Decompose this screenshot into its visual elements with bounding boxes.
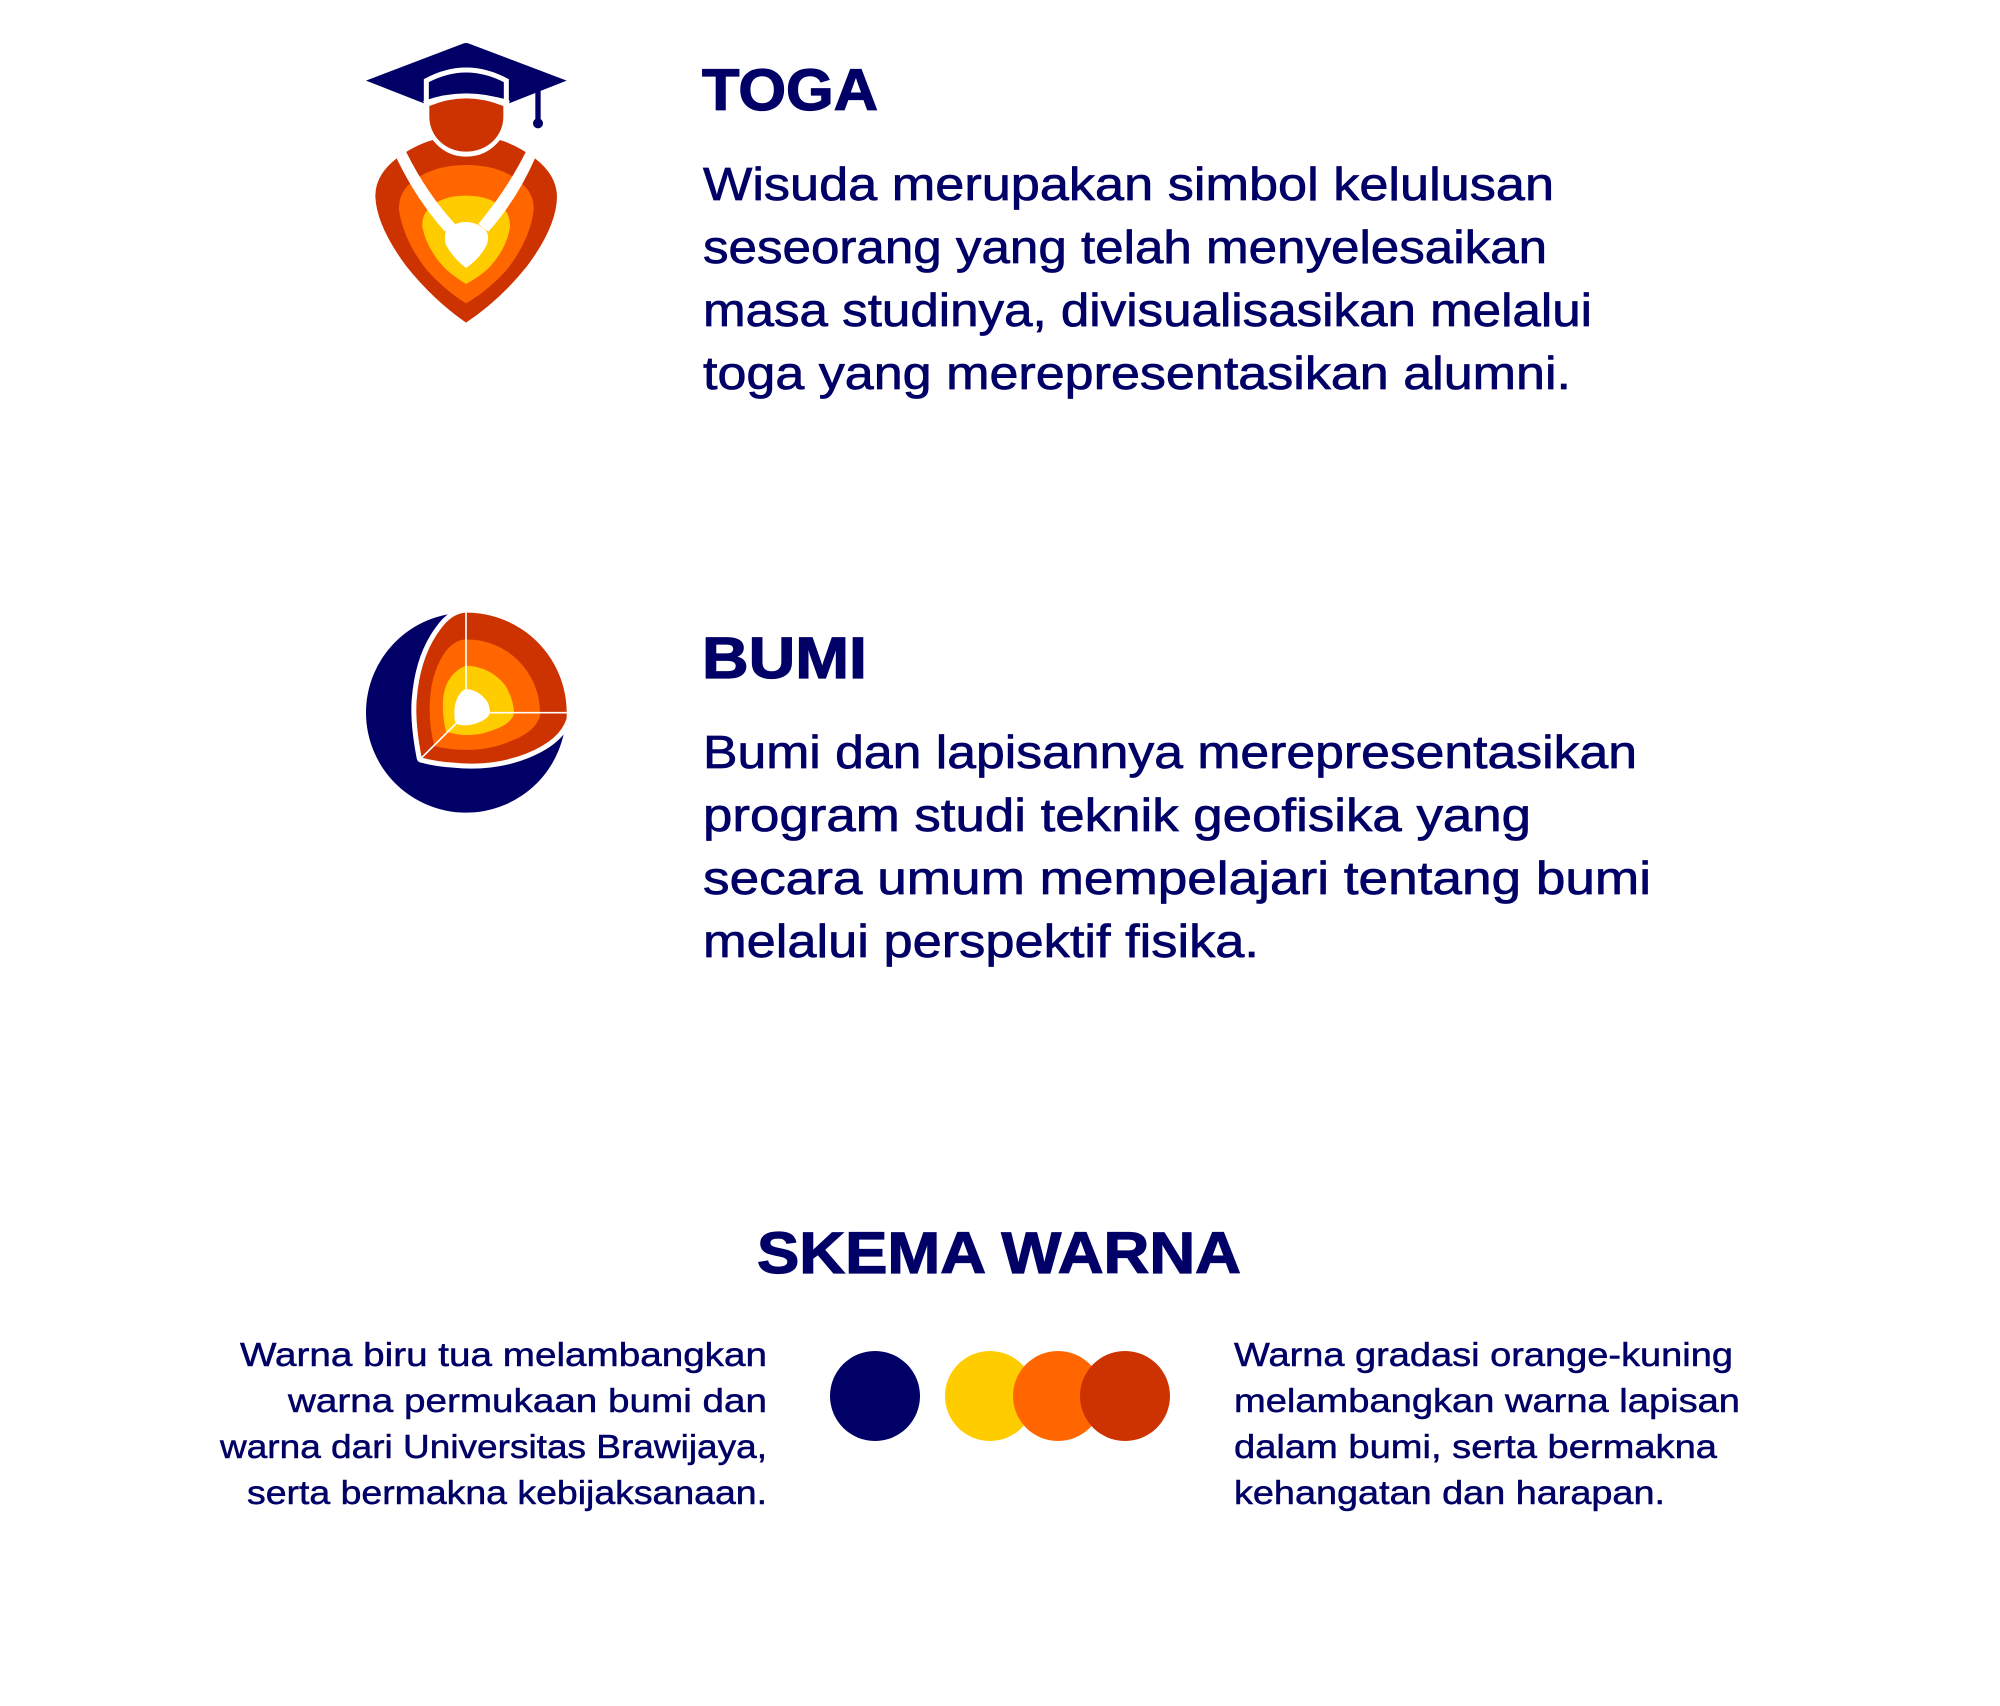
text block: toga description: seseorang yang telah menyelesaikan (703, 221, 1547, 273)
text block: gradient meaning: Warna gradasi orange-kuning (1234, 1336, 1733, 1373)
text block: gradient meaning (1234, 1336, 1740, 1511)
text block: toga description (703, 158, 1592, 399)
text block: navy meaning: Warna biru tua melambangkan (240, 1336, 767, 1373)
section lines (422, 613, 567, 758)
text block: navy meaning: warna dari Universitas Brawijaya, (219, 1428, 767, 1465)
text block: bumi description (703, 726, 1651, 967)
icon: graduate in toga (366, 43, 567, 323)
core (454, 689, 490, 725)
text block: bumi description: Bumi dan lapisannya merepresentasikan (703, 726, 1637, 778)
white stole (397, 152, 535, 268)
text block: gradient meaning: melambangkan warna lapisan (1234, 1382, 1740, 1419)
cutaway outline (416, 613, 567, 764)
outer layer (416, 613, 567, 764)
text block: navy meaning: warna permukaan bumi dan (287, 1382, 767, 1419)
text block: gradient meaning: dalam bumi, serta bermakna (1234, 1428, 1718, 1465)
mortarboard cap (366, 43, 567, 128)
text block: bumi description: secara umum mempelajari tentang bumi (703, 852, 1651, 904)
text block: toga description: masa studinya, divisualisasikan melalui (703, 284, 1592, 336)
earth surface (366, 613, 566, 813)
icon: earth layers (366, 613, 567, 813)
inner layer (443, 666, 514, 735)
gown layers (375, 140, 557, 323)
text block: bumi description: melalui perspektif fisika. (703, 915, 1259, 967)
swatches: yellow orange red (945, 1351, 1170, 1441)
heading: BUMI: BUMI (702, 626, 867, 691)
head (429, 98, 503, 152)
middle layer (430, 639, 540, 750)
heading: SKEMA WARNA: SKEMA WARNA (757, 1221, 1241, 1286)
swatch: navy (830, 1351, 920, 1441)
text block: gradient meaning: kehangatan dan harapan. (1234, 1474, 1665, 1511)
text block: toga description: Wisuda merupakan simbol kelulusan (703, 158, 1554, 210)
text block: navy meaning (219, 1336, 767, 1511)
text block: toga description: toga yang merepresentasikan alumni. (703, 347, 1571, 399)
text block: bumi description: program studi teknik geofisika yang (703, 789, 1531, 841)
heading: TOGA: TOGA (702, 58, 878, 123)
text block: navy meaning: serta bermakna kebijaksanaan. (247, 1474, 767, 1511)
